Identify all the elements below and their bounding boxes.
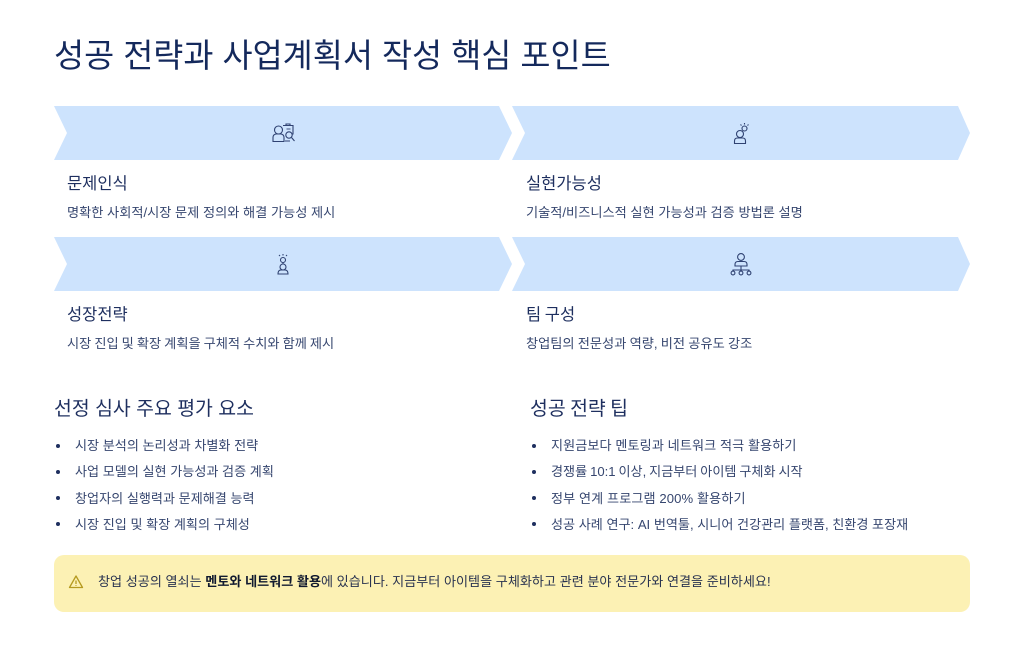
list: 전략 팁 [532, 438, 908, 532]
list: 전략 팁: 경쟁률 10:1 이상, 지금부터 아이템 구체화 시작 [551, 464, 803, 479]
icon: people and clipboard [273, 124, 294, 142]
icon: team hierarchy [731, 254, 751, 275]
icon: person with light bulb [734, 123, 748, 144]
list: 평가 요소: 창업자의 실행력과 문제해결 능력 [75, 491, 255, 506]
list: 평가 요소: 사업 모델의 실현 가능성과 검증 계획 [75, 464, 274, 479]
heading: 선정 심사 주요 평가 요소: 선정 심사 주요 평가 요소 [54, 398, 254, 420]
icon: warning triangle [68, 575, 84, 588]
text: 실현가능성 설명: 기술적/비즈니스적 실현 가능성과 검증 방법론 설명 [526, 205, 803, 220]
list: 평가 요소: 시장 진입 및 확장 계획의 구체성 [75, 517, 250, 532]
list: 전략 팁: 정부 연계 프로그램 200% 활용하기 [551, 491, 746, 506]
list: 전략 팁: 지원금보다 멘토링과 네트워크 적극 활용하기 [551, 438, 796, 453]
text: 문제인식 설명: 명확한 사회적/시장 문제 정의와 해결 가능성 제시 [67, 205, 335, 220]
title: 성공 전략과 사업계획서 작성 핵심 포인트 [54, 37, 611, 74]
text: 성장전략 설명: 시장 진입 및 확장 계획을 구체적 수치와 함께 제시 [67, 336, 334, 351]
list: 평가 요소: 시장 분석의 논리성과 차별화 전략 [75, 438, 258, 453]
text: 팀 구성 설명: 창업팀의 전문성과 역량, 비전 공유도 강조 [526, 336, 752, 351]
heading: 성장전략: 성장전략 [67, 306, 128, 324]
list: 전략 팁: 성공 사례 연구: AI 번역툴, 시니어 건강관리 플랫폼, 친환경 포장재 [551, 517, 908, 532]
callout [54, 555, 970, 612]
heading: 실현가능성: 실현가능성 [526, 175, 602, 193]
callout text: 창업 성공의 열쇠는 멘토와 네트워크 활용에 있습니다. 지금부터 아이템을 구체화하고 관련 분야 전문가와 연결을 준비하세요! [98, 574, 771, 589]
heading: 팀 구성: 팀 구성 [526, 306, 575, 324]
list: 평가 요소 [56, 438, 274, 532]
heading: 성공 전략 팁: 성공 전략 팁 [530, 398, 628, 420]
heading: 문제인식: 문제인식 [67, 175, 128, 193]
icon: figure with star [278, 254, 288, 274]
